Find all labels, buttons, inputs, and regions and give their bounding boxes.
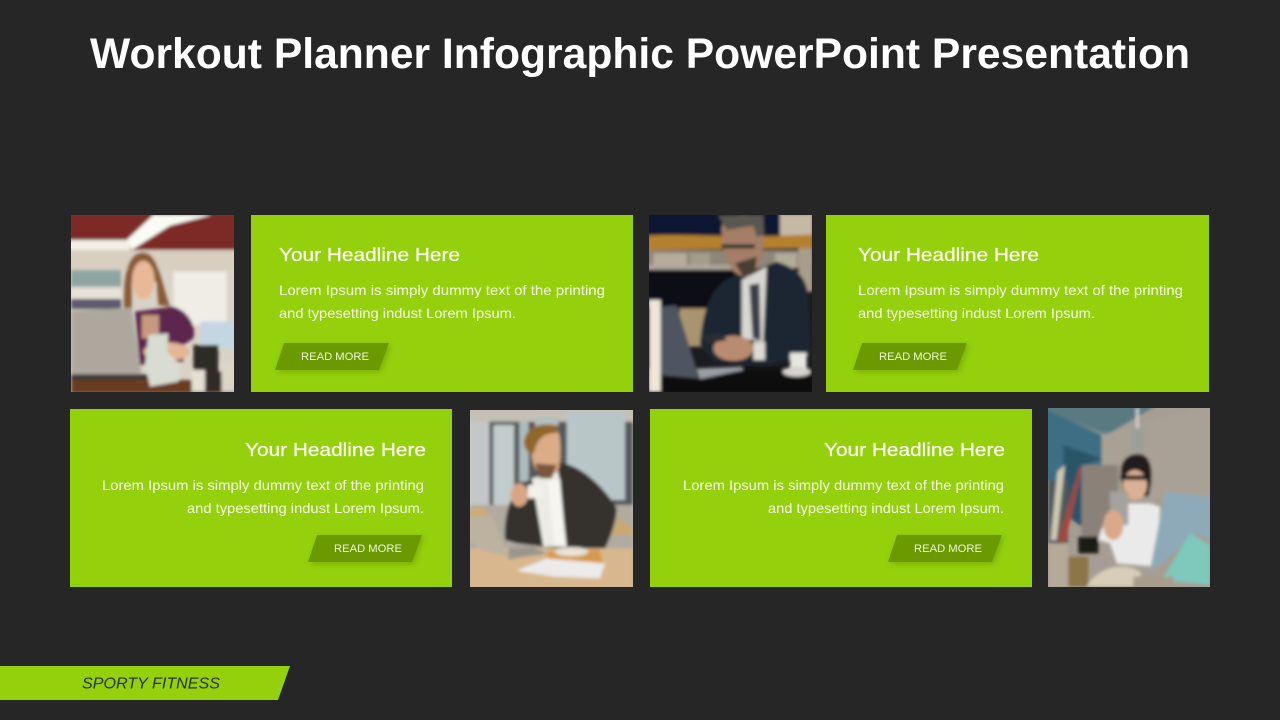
button four xyxy=(888,535,1002,562)
button one xyxy=(275,343,389,370)
title: Workout Planner Infographic PowerPoint Presentation xyxy=(90,30,1190,78)
footer label: SPORTY FITNESS xyxy=(82,676,220,692)
button one: READ MORE xyxy=(301,351,369,363)
photo: man in suit with phone xyxy=(649,215,812,392)
body text one: and typesetting indust Lorem Ipsum. xyxy=(279,305,516,321)
photo: woman with laptop at cafe xyxy=(71,215,234,392)
body text one: Lorem Ipsum is simply dummy text of the printing xyxy=(279,282,605,298)
button three: READ MORE xyxy=(334,543,402,555)
body text three: and typesetting indust Lorem Ipsum. xyxy=(187,500,424,516)
headline one: Your Headline Here xyxy=(279,244,460,265)
footer banner xyxy=(0,666,290,700)
body text four: and typesetting indust Lorem Ipsum. xyxy=(768,500,1004,516)
body text two: Lorem Ipsum is simply dummy text of the printing xyxy=(858,282,1183,298)
body text two: and typesetting indust Lorem Ipsum. xyxy=(858,305,1095,321)
body text three: Lorem Ipsum is simply dummy text of the printing xyxy=(102,477,424,493)
button three xyxy=(308,535,422,562)
photo: smiling man with coffee xyxy=(470,410,633,587)
headline two: Your Headline Here xyxy=(858,244,1039,265)
headline three: Your Headline Here xyxy=(245,439,426,460)
button two: READ MORE xyxy=(879,351,947,363)
headline four: Your Headline Here xyxy=(824,439,1005,460)
button two xyxy=(853,343,967,370)
body text four: Lorem Ipsum is simply dummy text of the printing xyxy=(683,477,1004,493)
panel: card four xyxy=(650,409,1032,587)
panel: card one xyxy=(251,215,633,392)
panel: card three xyxy=(70,409,452,587)
photo: woman with glasses and phone xyxy=(1048,408,1210,587)
button four: READ MORE xyxy=(914,543,982,555)
panel: card two xyxy=(826,215,1209,392)
